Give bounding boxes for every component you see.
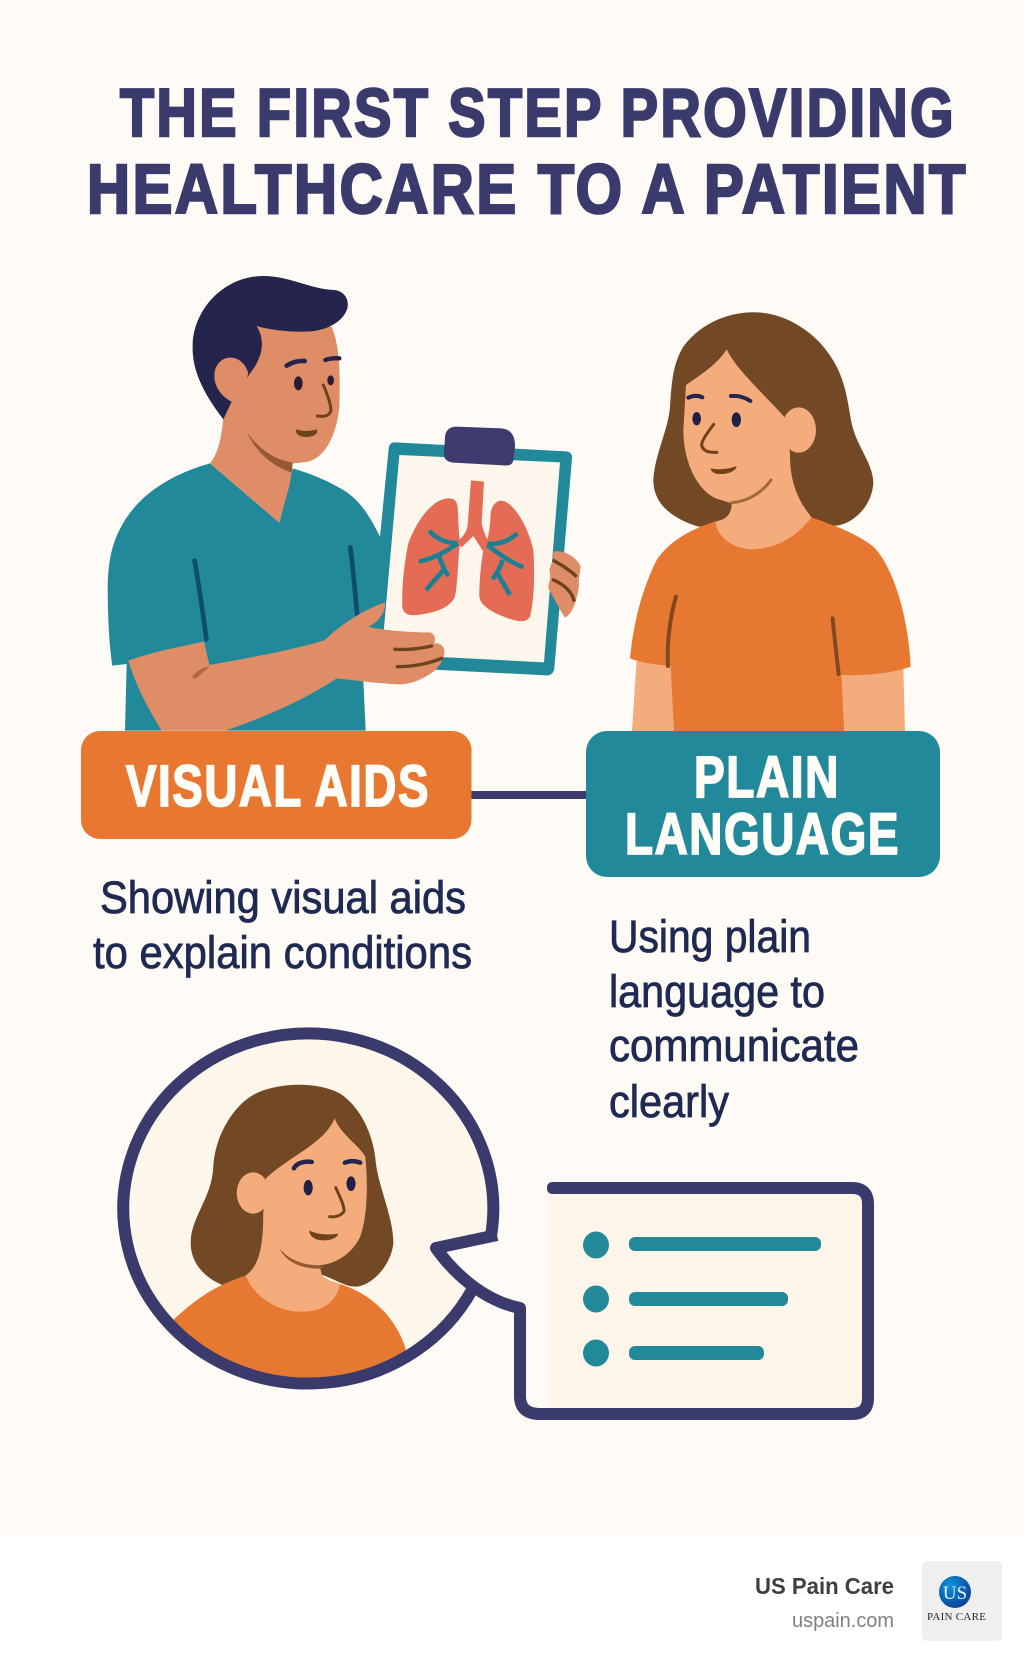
patient ear xyxy=(781,407,816,453)
description: plain language: clearly xyxy=(609,1076,729,1127)
checklist box xyxy=(436,1182,868,1414)
doctor shirt creases xyxy=(195,547,357,639)
bubble outline xyxy=(123,1033,493,1383)
doctor finger and elbow lines xyxy=(193,646,442,679)
doctor shirt xyxy=(108,463,390,731)
footer brand text: uspain.com xyxy=(792,1610,894,1632)
patient face and neck xyxy=(683,349,812,549)
footer brand text: US Pain Care xyxy=(755,1573,894,1599)
description: plain language: communicate xyxy=(609,1020,859,1071)
doctor chin shadow xyxy=(247,432,293,473)
footer logo: PAIN CARE xyxy=(927,1611,986,1623)
list row 2 xyxy=(583,1286,788,1312)
doctor ear xyxy=(214,358,248,402)
clipboard xyxy=(373,427,572,675)
illustration: patient woman xyxy=(630,312,911,732)
label: plain language: LANGUAGE xyxy=(625,802,900,867)
patient shirt xyxy=(630,517,911,732)
patient shirt creases xyxy=(668,597,839,674)
clipboard paper xyxy=(382,455,560,662)
list row 3 xyxy=(583,1340,764,1366)
patient hair xyxy=(653,312,873,527)
doctor hair xyxy=(193,276,348,419)
footer brand text xyxy=(755,1573,894,1632)
checklist top-left cap xyxy=(547,1182,567,1194)
list row 1 xyxy=(583,1232,821,1258)
illustration: doctor showing clipboard with lungs xyxy=(108,276,581,731)
doctor right hand fingers xyxy=(548,551,581,618)
footer logo xyxy=(922,1561,1002,1641)
description: plain language xyxy=(609,911,859,1127)
title xyxy=(87,75,968,228)
checklist outline and tail xyxy=(436,1188,868,1414)
label: visual aids: VISUAL AIDS xyxy=(126,754,430,819)
lungs xyxy=(402,480,534,621)
portrait of patient xyxy=(166,1085,406,1393)
doctor head and neck xyxy=(210,326,340,523)
patient arms xyxy=(632,660,905,732)
bubble notch xyxy=(438,1200,560,1308)
doctor face details xyxy=(287,358,339,437)
footer logo: US xyxy=(943,1583,967,1604)
speech bubble with patient portrait xyxy=(117,1027,500,1390)
patient face details xyxy=(688,396,771,503)
doctor arm and hand xyxy=(128,602,444,731)
label: plain language: PLAIN xyxy=(694,745,840,810)
label: plain language xyxy=(586,731,940,877)
description: visual aids: Showing visual aids xyxy=(100,872,466,923)
description: plain language: Using plain xyxy=(609,911,811,962)
connector between labels xyxy=(470,791,588,799)
label: visual aids xyxy=(81,731,472,839)
description: visual aids xyxy=(93,872,472,978)
description: plain language: language to xyxy=(609,966,825,1017)
description: visual aids: to explain conditions xyxy=(93,927,472,978)
clipboard clip xyxy=(444,427,515,466)
